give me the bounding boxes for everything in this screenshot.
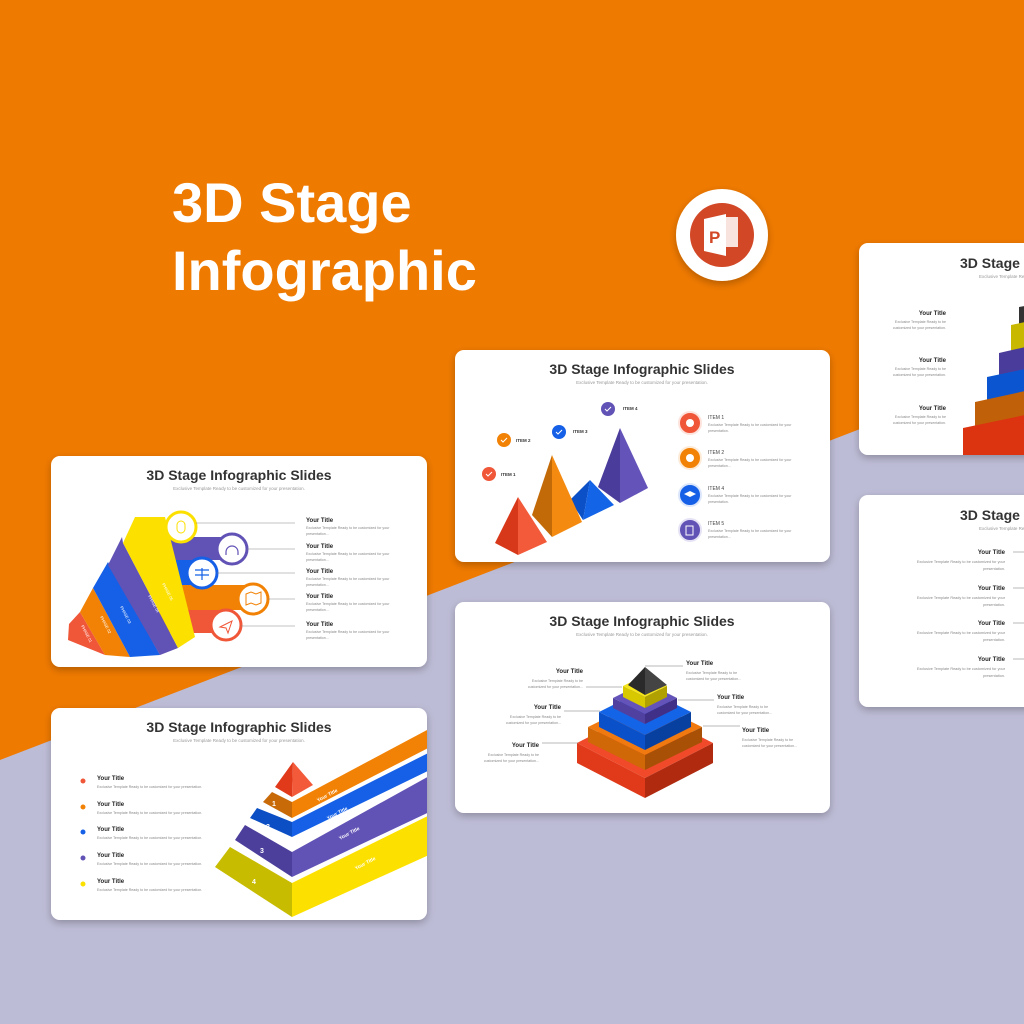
- list: presentation.: [983, 567, 1005, 571]
- labels: Exclusive Template Ready to be: [742, 738, 793, 742]
- item list: Exclusive Template Ready to be customized for your: [708, 529, 792, 533]
- labels: Exclusive Template Ready to be: [532, 679, 583, 683]
- list: Exclusive Template Ready to be customized for your presentation.: [97, 811, 202, 815]
- list: Exclusive Template Ready to be customized for your: [917, 560, 1006, 564]
- text list: Your Title: [306, 544, 334, 550]
- labels: customized for your presentation...: [742, 744, 797, 748]
- item list: presentation...: [708, 464, 731, 468]
- text list: presentation...: [306, 532, 329, 536]
- slide: funnel phases: Exclusive Template Ready to be customized for your presentation.: [173, 486, 305, 491]
- text list: [306, 518, 390, 640]
- item list: presentation.: [708, 429, 729, 433]
- icon: powerpoint: P: [709, 228, 720, 247]
- labels: Exclusive Template Ready to be: [895, 367, 946, 371]
- text list: Your Title: [306, 594, 334, 600]
- slide: pyramids items: Exclusive Template Ready to be customized for your presentation.: [576, 380, 708, 385]
- list: Exclusive Template Ready to be customized for your presentation.: [97, 836, 202, 840]
- slide title: 3D Stage Infographic Slides: [549, 361, 735, 377]
- pyramid chevrons: Your Title: [338, 826, 361, 842]
- slide: list with arrows (cropped): [859, 495, 1024, 707]
- text list: Exclusive Template Ready to be customized for your: [306, 526, 390, 530]
- pyramid chevrons: Your Title: [354, 856, 377, 872]
- labels: Exclusive Template Ready to be: [895, 415, 946, 419]
- text list: Exclusive Template Ready to be customized for your: [306, 602, 390, 606]
- slide: chevron pyramid: Exclusive Template Ready to be customized for your presentation.: [173, 738, 305, 743]
- list: Your Title: [978, 621, 1006, 627]
- list: Exclusive Template Ready to be customized for your presentation.: [97, 785, 202, 789]
- phase diagram: [68, 512, 268, 657]
- labels: customized for your presentation...: [717, 711, 772, 715]
- pyramid chevrons: Your Title: [316, 788, 339, 804]
- labels: Your Title: [686, 661, 714, 667]
- slide title: 3D Stage Infographic Slides: [146, 719, 332, 735]
- list: Exclusive Template Ready to be customized for your: [917, 631, 1006, 635]
- list: Your Title: [978, 550, 1006, 556]
- labels: Your Title: [717, 695, 745, 701]
- list: Exclusive Template Ready to be customized for your: [917, 667, 1006, 671]
- main title: 3D Stage: [172, 171, 412, 234]
- text list: Exclusive Template Ready to be customized for your: [306, 552, 390, 556]
- labels: Exclusive Template Ready to be: [510, 715, 561, 719]
- icon: powerpoint: [676, 189, 768, 281]
- text list: presentation...: [306, 636, 329, 640]
- labels: Your Title: [534, 705, 562, 711]
- item list: ITEM 1: [708, 415, 724, 421]
- list: presentation.: [983, 638, 1005, 642]
- connector lines: [196, 523, 295, 626]
- item list: ITEM 2: [708, 450, 724, 456]
- item list: presentation...: [708, 535, 731, 539]
- phase diagram: PHASE 02: [99, 615, 113, 635]
- item list: presentation.: [708, 500, 729, 504]
- labels: customized for your presentation.: [893, 421, 946, 425]
- labels: Exclusive Template Ready to be: [686, 671, 737, 675]
- pyramid chevrons: [215, 723, 440, 917]
- main title: [172, 171, 477, 302]
- list: Exclusive Template Ready to be customized for your presentation.: [97, 862, 202, 866]
- labels: [893, 311, 947, 425]
- list: [917, 550, 1006, 678]
- text list: Your Title: [306, 622, 334, 628]
- item list: Exclusive Template Ready to be customized for your: [708, 494, 792, 498]
- text list: Your Title: [306, 569, 334, 575]
- labels: customized for your presentation...: [484, 759, 539, 763]
- slide: funnel phases: [51, 456, 427, 667]
- labels: Your Title: [512, 743, 540, 749]
- labels: Your Title: [919, 311, 947, 317]
- item markers: ITEM 4: [623, 406, 638, 411]
- stepped pyramid chart: [577, 667, 713, 798]
- slide title: 3D Stage Infographic Slides: [146, 467, 332, 483]
- text list: presentation...: [306, 608, 329, 612]
- slide: stepped pyramid: [455, 602, 830, 813]
- list: [80, 776, 202, 892]
- list: Your Title: [978, 657, 1006, 663]
- pyramid chevrons: 2: [266, 824, 270, 831]
- phase diagram: PHASE 03: [119, 605, 133, 625]
- text list: presentation...: [306, 558, 329, 562]
- list: Your Title: [97, 776, 125, 782]
- labels: Your Title: [742, 728, 770, 734]
- item list: [679, 412, 792, 541]
- labels: Exclusive Template Ready to be: [488, 753, 539, 757]
- text list: Exclusive Template Ready to be customized for your: [306, 577, 390, 581]
- labels: customized for your presentation...: [686, 677, 741, 681]
- item list: ITEM 5: [708, 521, 724, 527]
- labels: customized for your presentation.: [893, 326, 946, 330]
- list: Your Title: [97, 879, 125, 885]
- list: presentation.: [983, 674, 1005, 678]
- phase diagram: PHASE 04: [147, 594, 161, 614]
- labels: Exclusive Template Ready to be: [717, 705, 768, 709]
- slide: pyramids items: [455, 350, 830, 562]
- slide: stepped pyramid: Exclusive Template Ready to be customized for your presentation.: [576, 632, 708, 637]
- slide title: 3D Stage Infographic Slides: [549, 613, 735, 629]
- item markers: ITEM 1: [501, 472, 516, 477]
- item list: ITEM 4: [708, 486, 724, 492]
- list: presentation.: [983, 603, 1005, 607]
- text list: Your Title: [306, 518, 334, 524]
- list: Exclusive Template Ready to be customized for your presentation.: [97, 888, 202, 892]
- text list: Exclusive Template Ready to be customized for your: [306, 630, 390, 634]
- pyramid chevrons: Your Title: [326, 806, 349, 822]
- labels: Exclusive Template Ready to be: [895, 320, 946, 324]
- list: Your Title: [97, 827, 125, 833]
- labels: Your Title: [919, 406, 947, 412]
- labels: customized for your presentation.: [893, 373, 946, 377]
- phase diagram: PHASE 01: [80, 624, 94, 644]
- pyramid chevrons: 4: [252, 879, 256, 886]
- list: Your Title: [978, 586, 1006, 592]
- pyramids chart: [495, 428, 648, 555]
- item markers: ITEM 2: [516, 438, 531, 443]
- item markers: ITEM 3: [573, 429, 588, 434]
- pyramid chevrons: 1: [272, 801, 276, 808]
- item list: Exclusive Template Ready to be customized for your: [708, 423, 792, 427]
- stairs chart: [963, 305, 1024, 455]
- pyramid chevrons: 3: [260, 848, 264, 855]
- labels: Your Title: [556, 669, 584, 675]
- slide: stairs (cropped): [859, 243, 1024, 455]
- labels: Your Title: [919, 358, 947, 364]
- item list: Exclusive Template Ready to be customized for your: [708, 458, 792, 462]
- item markers: [482, 402, 638, 481]
- labels: [484, 661, 797, 763]
- main title: Infographic: [172, 239, 477, 302]
- phase diagram: PHASE 05: [161, 582, 175, 602]
- list: Your Title: [97, 802, 125, 808]
- list: Exclusive Template Ready to be customized for your: [917, 596, 1006, 600]
- list: Your Title: [97, 853, 125, 859]
- slide: chevron pyramid: [51, 708, 440, 920]
- labels: customized for your presentation...: [506, 721, 561, 725]
- text list: presentation...: [306, 583, 329, 587]
- labels: customized for your presentation...: [528, 685, 583, 689]
